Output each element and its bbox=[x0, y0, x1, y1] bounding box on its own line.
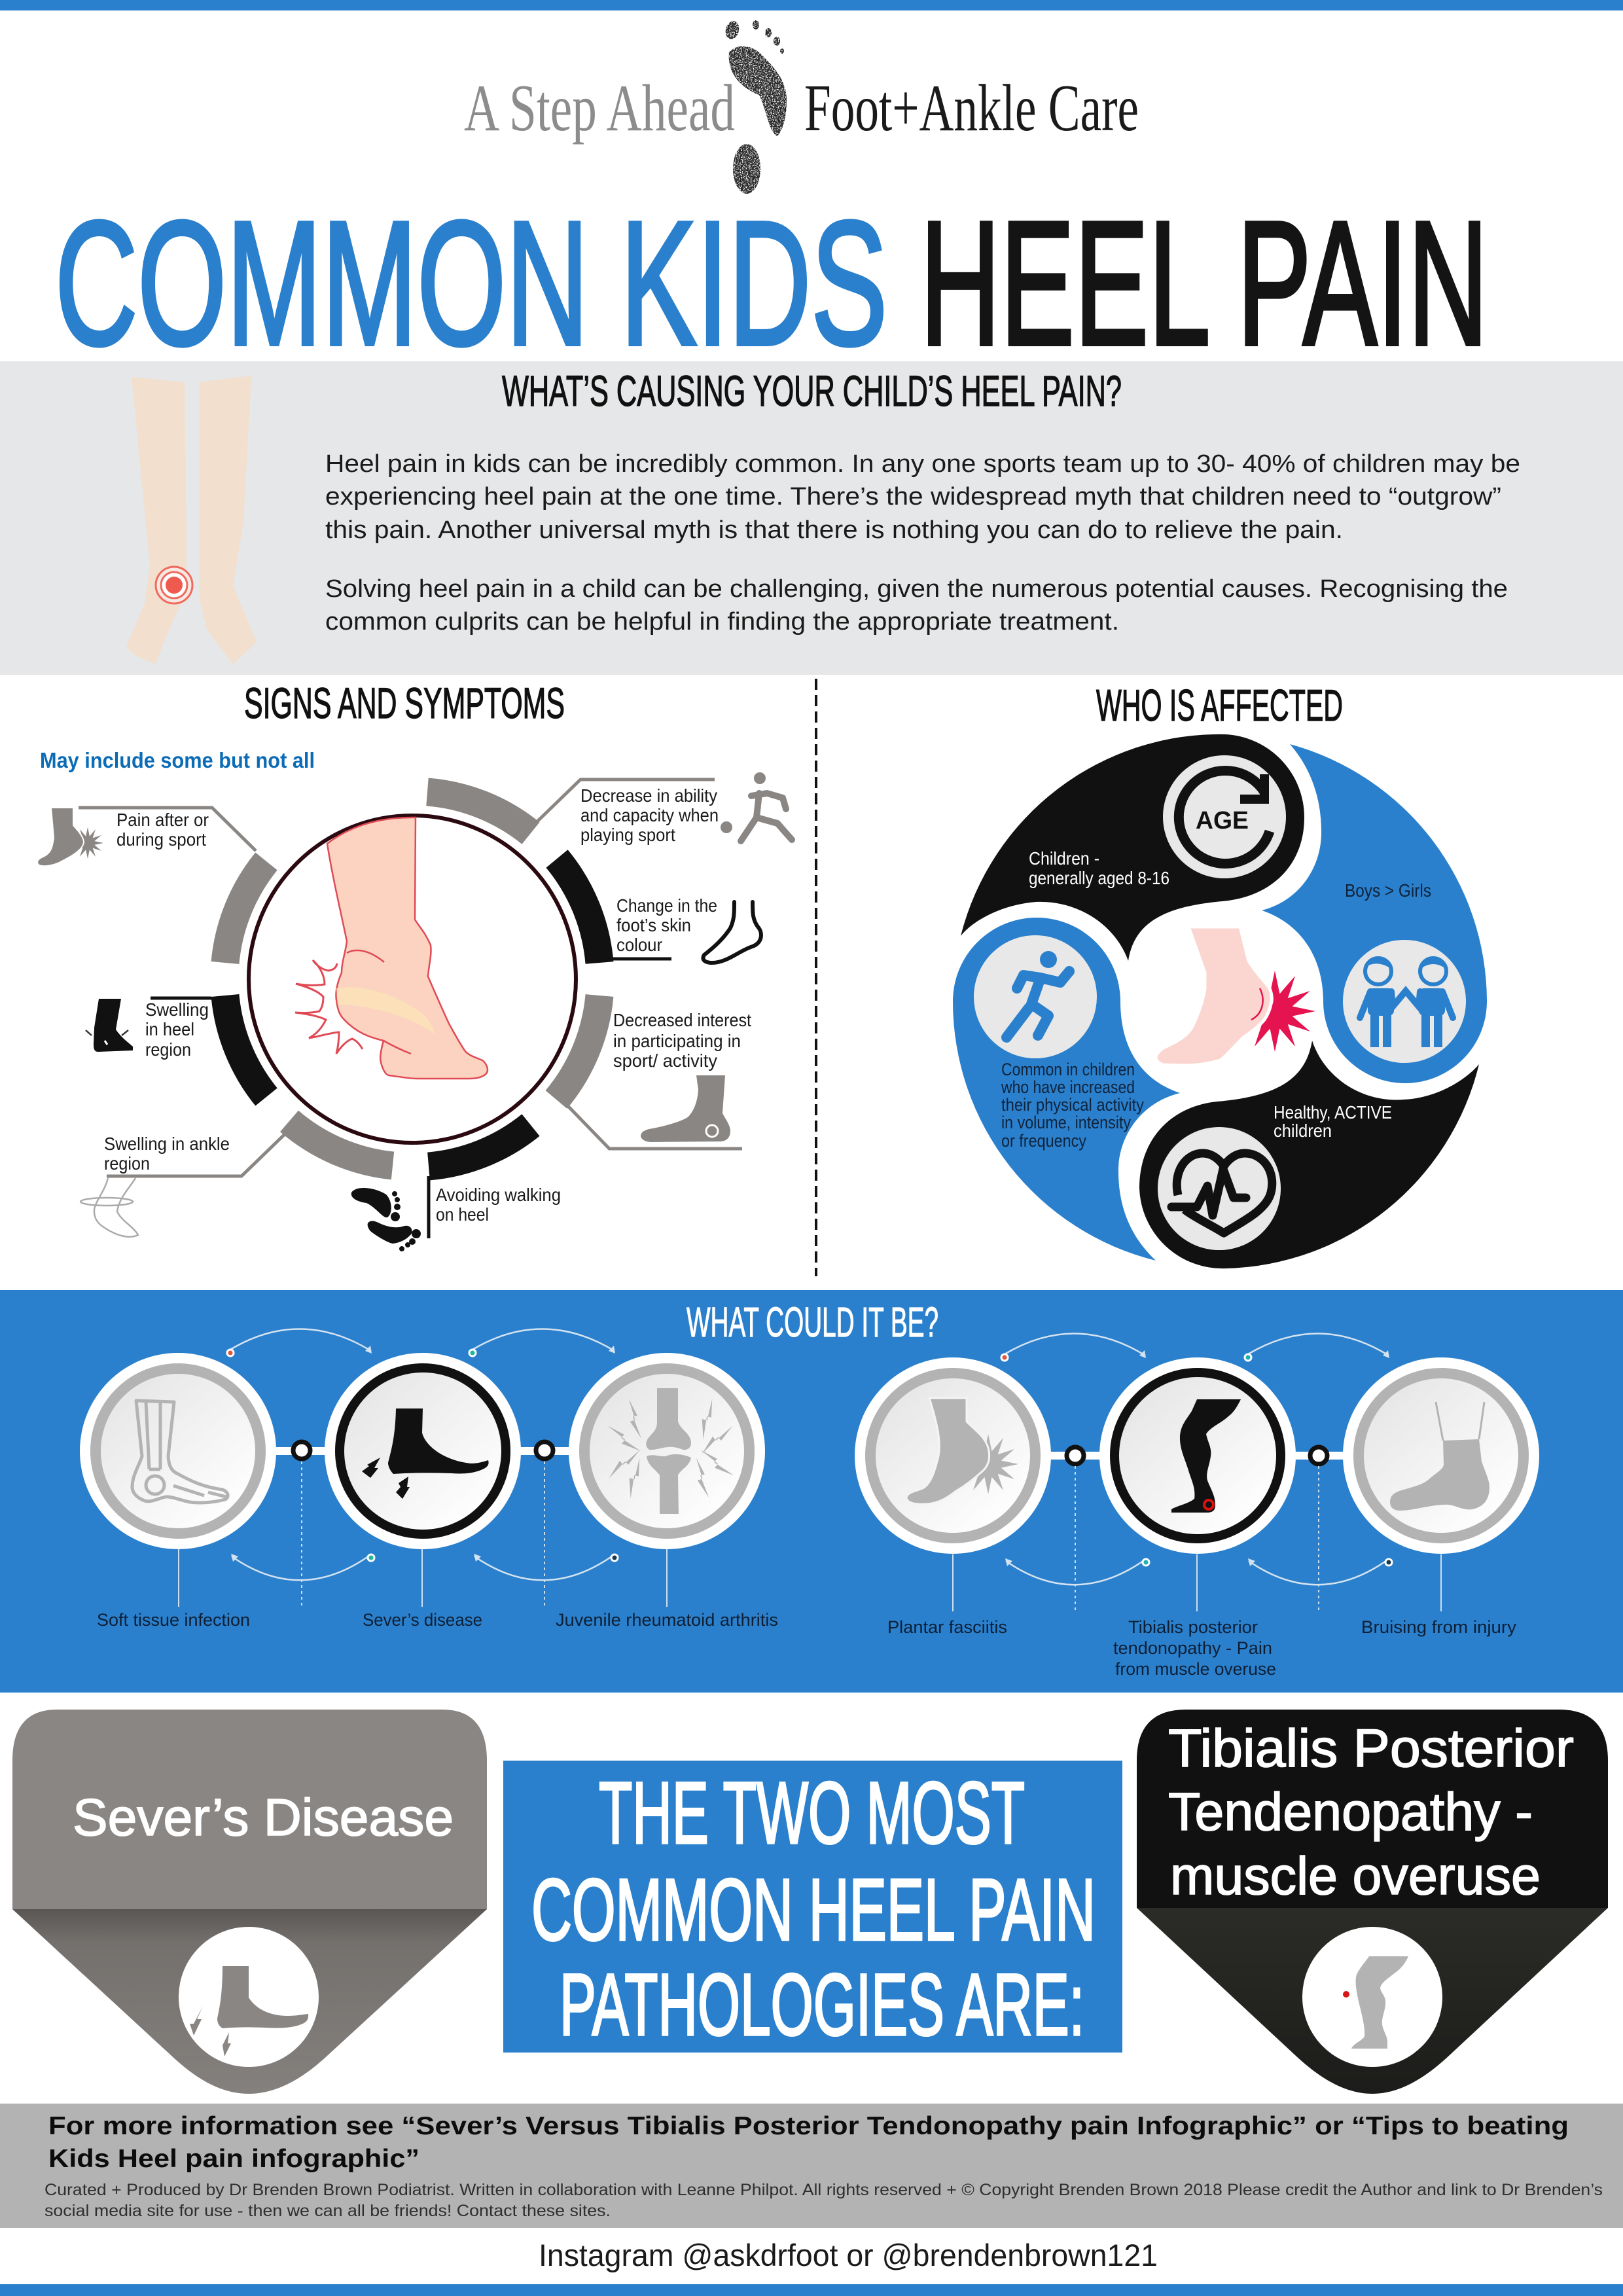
circle: plantar fasciitis bbox=[855, 1357, 1051, 1554]
shield title: Sever’s Disease bbox=[73, 1788, 454, 1846]
credit text: social media site for use - then we can all be friends! Contact these sites. bbox=[45, 2202, 611, 2220]
more information text bbox=[48, 2112, 1569, 2173]
label: pain after sport: during sport bbox=[116, 829, 206, 850]
label: common in children bbox=[1001, 1060, 1144, 1151]
labels: first row: Soft tissue infection bbox=[97, 1610, 250, 1630]
label: decrease in ability: playing sport bbox=[580, 825, 675, 845]
label: common in children: who have increased bbox=[1001, 1077, 1135, 1097]
label: boys greater than girls: Boys > Girls bbox=[1345, 880, 1431, 901]
label: healthy active bbox=[1274, 1102, 1392, 1141]
swirl segment: boys and girls bbox=[1262, 744, 1487, 1083]
label: children: Children - bbox=[1029, 848, 1099, 869]
label: pain after sport: Pain after or bbox=[116, 810, 209, 830]
label: pain after sport bbox=[116, 810, 209, 850]
shield badge bbox=[179, 1927, 319, 2067]
icon: grey leg with red dot bbox=[1343, 1956, 1408, 2049]
label: children: generally aged 8-16 bbox=[1029, 868, 1169, 888]
divider: dashed line bbox=[815, 679, 817, 1276]
labels: second row bbox=[887, 1617, 1517, 1679]
label: swelling in heel: Swelling bbox=[145, 999, 209, 1020]
icon: pain lines bbox=[295, 960, 363, 1054]
illustration: heel foot bbox=[327, 817, 488, 1079]
icon: runner bbox=[1007, 951, 1069, 1037]
icon: ankle outline bbox=[80, 1178, 138, 1237]
shield title: muscle overuse bbox=[1170, 1846, 1541, 1906]
label: swelling in ankle: Swelling in ankle bbox=[104, 1134, 230, 1154]
callout: two most common: THE TWO MOST bbox=[599, 1765, 1025, 1862]
label: decrease in ability bbox=[580, 785, 719, 845]
icon: age arrow: AGE bbox=[1196, 807, 1249, 834]
second paragraph bbox=[325, 575, 1508, 636]
icon: grey foot with bolts bbox=[190, 1966, 308, 2056]
label: change in skin colour: colour bbox=[616, 935, 662, 955]
circle: soft tissue infection bbox=[80, 1353, 276, 1549]
icon: foot in sock bbox=[1390, 1402, 1489, 1511]
label: decreased interest bbox=[613, 1010, 751, 1071]
icon: running person bbox=[721, 772, 792, 841]
panel: what could it be bbox=[0, 1290, 1623, 1693]
labels: first row: Sever’s disease bbox=[363, 1610, 482, 1630]
circle: juvenile rheumatoid arthritis bbox=[569, 1353, 765, 1549]
label: decreased interest: in participating in bbox=[613, 1031, 741, 1051]
icon: knee joint with bolts bbox=[605, 1388, 735, 1514]
labels: second row: Bruising from injury bbox=[1361, 1617, 1517, 1637]
labels: second row: tendonopathy - Pain bbox=[1113, 1638, 1272, 1658]
label: change in skin colour: foot’s skin bbox=[616, 915, 691, 935]
more information text: For more information see “Sever’s Versus Tibialis Posterior Tendonopathy pain Infographic” or “Tips to beating bbox=[48, 2112, 1569, 2140]
label: common in children: or frequency bbox=[1001, 1131, 1086, 1151]
label: common in children: Common in children bbox=[1001, 1060, 1135, 1079]
labels: first row bbox=[97, 1610, 778, 1630]
instagram line: Instagram @askdrfoot or @brendenbrown121 bbox=[539, 2238, 1158, 2272]
top colour bar bbox=[0, 0, 1623, 10]
labels: second row: Plantar fasciitis bbox=[887, 1617, 1007, 1637]
callout: two most common bbox=[503, 1761, 1122, 2054]
arrowheads bbox=[231, 1346, 1389, 1566]
more information text: Kids Heel pain infographic” bbox=[48, 2145, 419, 2173]
shield: severs disease bbox=[12, 1710, 487, 2094]
circle: severs disease bbox=[325, 1353, 521, 1549]
label: swelling in heel bbox=[145, 999, 209, 1060]
icon: foot with pain burst bbox=[906, 1398, 1018, 1504]
labels: second row: Tibialis posterior bbox=[1128, 1617, 1258, 1637]
label: swelling in ankle bbox=[104, 1134, 230, 1174]
icon: foot skeleton bbox=[132, 1401, 228, 1503]
bottom colour bar bbox=[0, 2284, 1623, 2296]
labels: second row: from muscle overuse bbox=[1115, 1659, 1276, 1679]
labels: first row: Juvenile rheumatoid arthritis bbox=[556, 1610, 778, 1630]
shield title: Tibialis Posterior bbox=[1168, 1719, 1574, 1778]
second paragraph: Solving heel pain in a child can be challenging, given the numerous potential causes. Recognising the bbox=[325, 575, 1508, 603]
label: children bbox=[1029, 848, 1169, 888]
dotted and solid leader lines bbox=[179, 1462, 1441, 1611]
label: healthy active: Healthy, ACTIVE bbox=[1274, 1102, 1392, 1122]
icon: footprint bbox=[724, 20, 787, 194]
panel: who is affected bbox=[953, 681, 1487, 1268]
connector bars bbox=[272, 1447, 1350, 1460]
swirl segment: children age bbox=[961, 734, 1304, 961]
heading: WHAT COULD IT BE? bbox=[687, 1299, 938, 1346]
shield title: Tendenopathy - bbox=[1168, 1782, 1533, 1842]
label: change in skin colour bbox=[616, 895, 717, 955]
icon: foot outline bbox=[703, 902, 761, 963]
label: change in skin colour: Change in the bbox=[616, 895, 717, 916]
icon: boy and girl bbox=[1360, 958, 1453, 1047]
icon: heart with pulse bbox=[1171, 1153, 1272, 1233]
icon: grey foot pain bbox=[37, 808, 103, 866]
label: swelling in heel: in heel bbox=[145, 1019, 194, 1039]
icon: footprints bbox=[351, 1188, 421, 1251]
circle: bruising bbox=[1343, 1357, 1539, 1554]
heading: WHAT’S CAUSING YOUR CHILD’S HEEL PAIN? bbox=[502, 367, 1122, 415]
connector nodes bbox=[293, 1442, 1327, 1464]
icon: black leg with red spot bbox=[1171, 1399, 1241, 1513]
label: common in children: their physical activity bbox=[1001, 1095, 1144, 1115]
title part: common kids: COMMON KIDS bbox=[55, 185, 887, 382]
logo bbox=[464, 20, 1139, 194]
panel: more information footer bbox=[0, 2104, 1623, 2228]
central circle bbox=[249, 816, 576, 1143]
heading: SIGNS AND SYMPTOMS bbox=[244, 679, 565, 727]
label: avoiding walking: Avoiding walking bbox=[436, 1185, 561, 1205]
panel: what's causing bbox=[0, 361, 1623, 675]
icon: black foot swelling bbox=[86, 999, 133, 1052]
illustration: central foot with pain burst bbox=[1156, 927, 1315, 1066]
shield title bbox=[1168, 1719, 1574, 1906]
shield: tibialis posterior bbox=[1137, 1710, 1608, 2094]
label: decrease in ability: and capacity when bbox=[580, 805, 719, 825]
intro paragraph: this pain. Another universal myth is that there is nothing you can do to relieve the pain. bbox=[325, 516, 1343, 544]
title bbox=[55, 185, 1488, 382]
intro paragraph bbox=[325, 450, 1520, 544]
connector lines bbox=[79, 780, 742, 1238]
subheading: May include some but not all bbox=[40, 748, 315, 772]
logo text: Foot+Ankle Care: Foot+Ankle Care bbox=[804, 71, 1139, 145]
logo text: A Step Ahead: A Step Ahead bbox=[464, 71, 735, 145]
intro paragraph: experiencing heel pain at the one time. There’s the widespread myth that children need to “outgrow” bbox=[325, 483, 1501, 511]
label: avoiding walking bbox=[436, 1185, 561, 1225]
intro paragraph: Heel pain in kids can be incredibly common. In any one sports team up to 30- 40% of children may be bbox=[325, 450, 1520, 478]
second paragraph: common culprits can be helpful in finding the appropriate treatment. bbox=[325, 608, 1119, 636]
label: swelling in heel: region bbox=[145, 1039, 191, 1060]
credit text: Curated + Produced by Dr Brenden Brown Podiatrist. Written in collaboration with Leanne Philpot. All rights reserved + © Copyright Brenden Brown 2018 Please credit the Author and link to Dr Brenden’s bbox=[45, 2181, 1603, 2199]
icon: black foot with bolts bbox=[362, 1408, 489, 1499]
label: avoiding walking: on heel bbox=[436, 1204, 489, 1225]
small coloured dots bbox=[227, 1350, 1392, 1566]
illustration: legs with heel target bbox=[126, 376, 257, 664]
panel: signs and symptoms bbox=[37, 679, 792, 1251]
label: decrease in ability: Decrease in ability bbox=[580, 785, 717, 806]
callout: two most common: COMMON HEEL PAIN bbox=[531, 1861, 1096, 1959]
curved arrows bbox=[230, 1329, 1389, 1585]
callout: two most common: PATHOLOGIES ARE: bbox=[560, 1956, 1084, 2054]
shield badge bbox=[1302, 1927, 1442, 2067]
label: decreased interest: sport/ activity bbox=[613, 1050, 717, 1071]
circle: tibialis posterior bbox=[1099, 1357, 1296, 1554]
label: swelling in ankle: region bbox=[104, 1153, 150, 1174]
swirl segment: healthy active bbox=[1139, 1041, 1479, 1268]
swirl segment: increased activity bbox=[953, 918, 1180, 1261]
label: decreased interest: Decreased interest bbox=[613, 1010, 751, 1030]
icon: grey foot with target bbox=[641, 1075, 730, 1142]
heading: WHO IS AFFECTED bbox=[1096, 681, 1343, 730]
label: common in children: in volume, intensity bbox=[1001, 1113, 1131, 1132]
credit text bbox=[45, 2181, 1603, 2220]
icon: age arrow bbox=[1179, 770, 1270, 863]
label: healthy active: children bbox=[1274, 1121, 1332, 1141]
segmented ring bbox=[225, 792, 599, 1166]
